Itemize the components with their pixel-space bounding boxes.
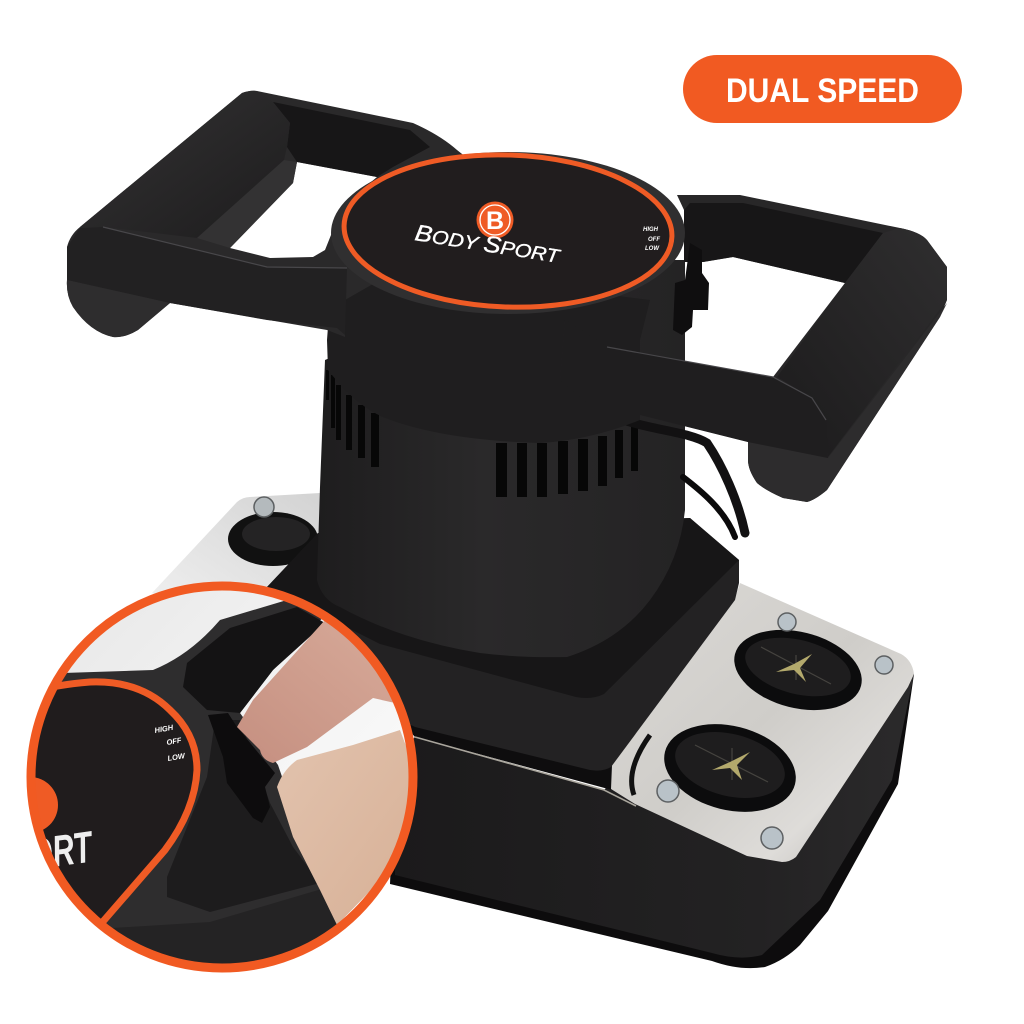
inset: switch close-up bbox=[26, 582, 418, 972]
motor body bbox=[317, 260, 685, 657]
chrome plate: right bbox=[611, 583, 914, 862]
inset labels bbox=[155, 724, 185, 761]
power cord bbox=[618, 418, 745, 537]
inset disc text: ORT bbox=[26, 822, 97, 880]
badge: dual speed: DUAL SPEED bbox=[726, 72, 919, 110]
chrome plate: left bbox=[152, 493, 330, 610]
index finger bbox=[237, 621, 393, 763]
left button bbox=[228, 512, 318, 566]
button: upper bbox=[726, 617, 870, 723]
button: lower bbox=[655, 711, 805, 825]
switch labels bbox=[643, 227, 660, 252]
brand name: BODY SPORT bbox=[413, 219, 563, 268]
switch bbox=[673, 243, 709, 335]
inset labels: OFF bbox=[166, 735, 183, 747]
inset ring bbox=[31, 586, 413, 968]
hand bbox=[277, 730, 415, 925]
handle: left bbox=[67, 91, 520, 337]
left pad end bbox=[67, 280, 170, 337]
inset logo bbox=[36, 778, 58, 830]
vents: right bbox=[496, 426, 638, 497]
vents: left bbox=[326, 370, 379, 467]
switch labels: LOW bbox=[645, 246, 660, 252]
switch labels: OFF bbox=[648, 237, 660, 243]
logo mark: B bbox=[486, 207, 504, 235]
right grip bbox=[777, 228, 947, 457]
left upper interior bbox=[273, 102, 430, 177]
massager base housing bbox=[390, 674, 914, 968]
right pad bbox=[748, 303, 947, 502]
right front bar bbox=[560, 320, 828, 458]
hub top bbox=[331, 149, 709, 335]
inset switch bbox=[208, 713, 275, 823]
hub body bbox=[327, 260, 650, 443]
inset lower frame bbox=[114, 890, 336, 964]
hub top disc bbox=[341, 149, 675, 313]
square motor mount bbox=[267, 518, 739, 771]
inset frame bbox=[62, 601, 322, 928]
inset lower window bbox=[167, 720, 320, 912]
screws bbox=[657, 613, 893, 849]
handle: right bbox=[560, 195, 947, 502]
left pad bbox=[197, 160, 297, 248]
inset labels: HIGH bbox=[154, 723, 174, 735]
inset labels: LOW bbox=[167, 751, 186, 763]
inset upper window bbox=[183, 607, 325, 713]
logo mark bbox=[476, 202, 514, 238]
left front bar bbox=[67, 227, 347, 335]
left screw bbox=[254, 497, 274, 517]
right upper interior bbox=[684, 203, 883, 283]
switch labels: HIGH bbox=[643, 227, 659, 233]
badge: dual speed bbox=[683, 55, 962, 123]
left grip bbox=[80, 91, 290, 238]
inset disc bbox=[36, 678, 200, 924]
